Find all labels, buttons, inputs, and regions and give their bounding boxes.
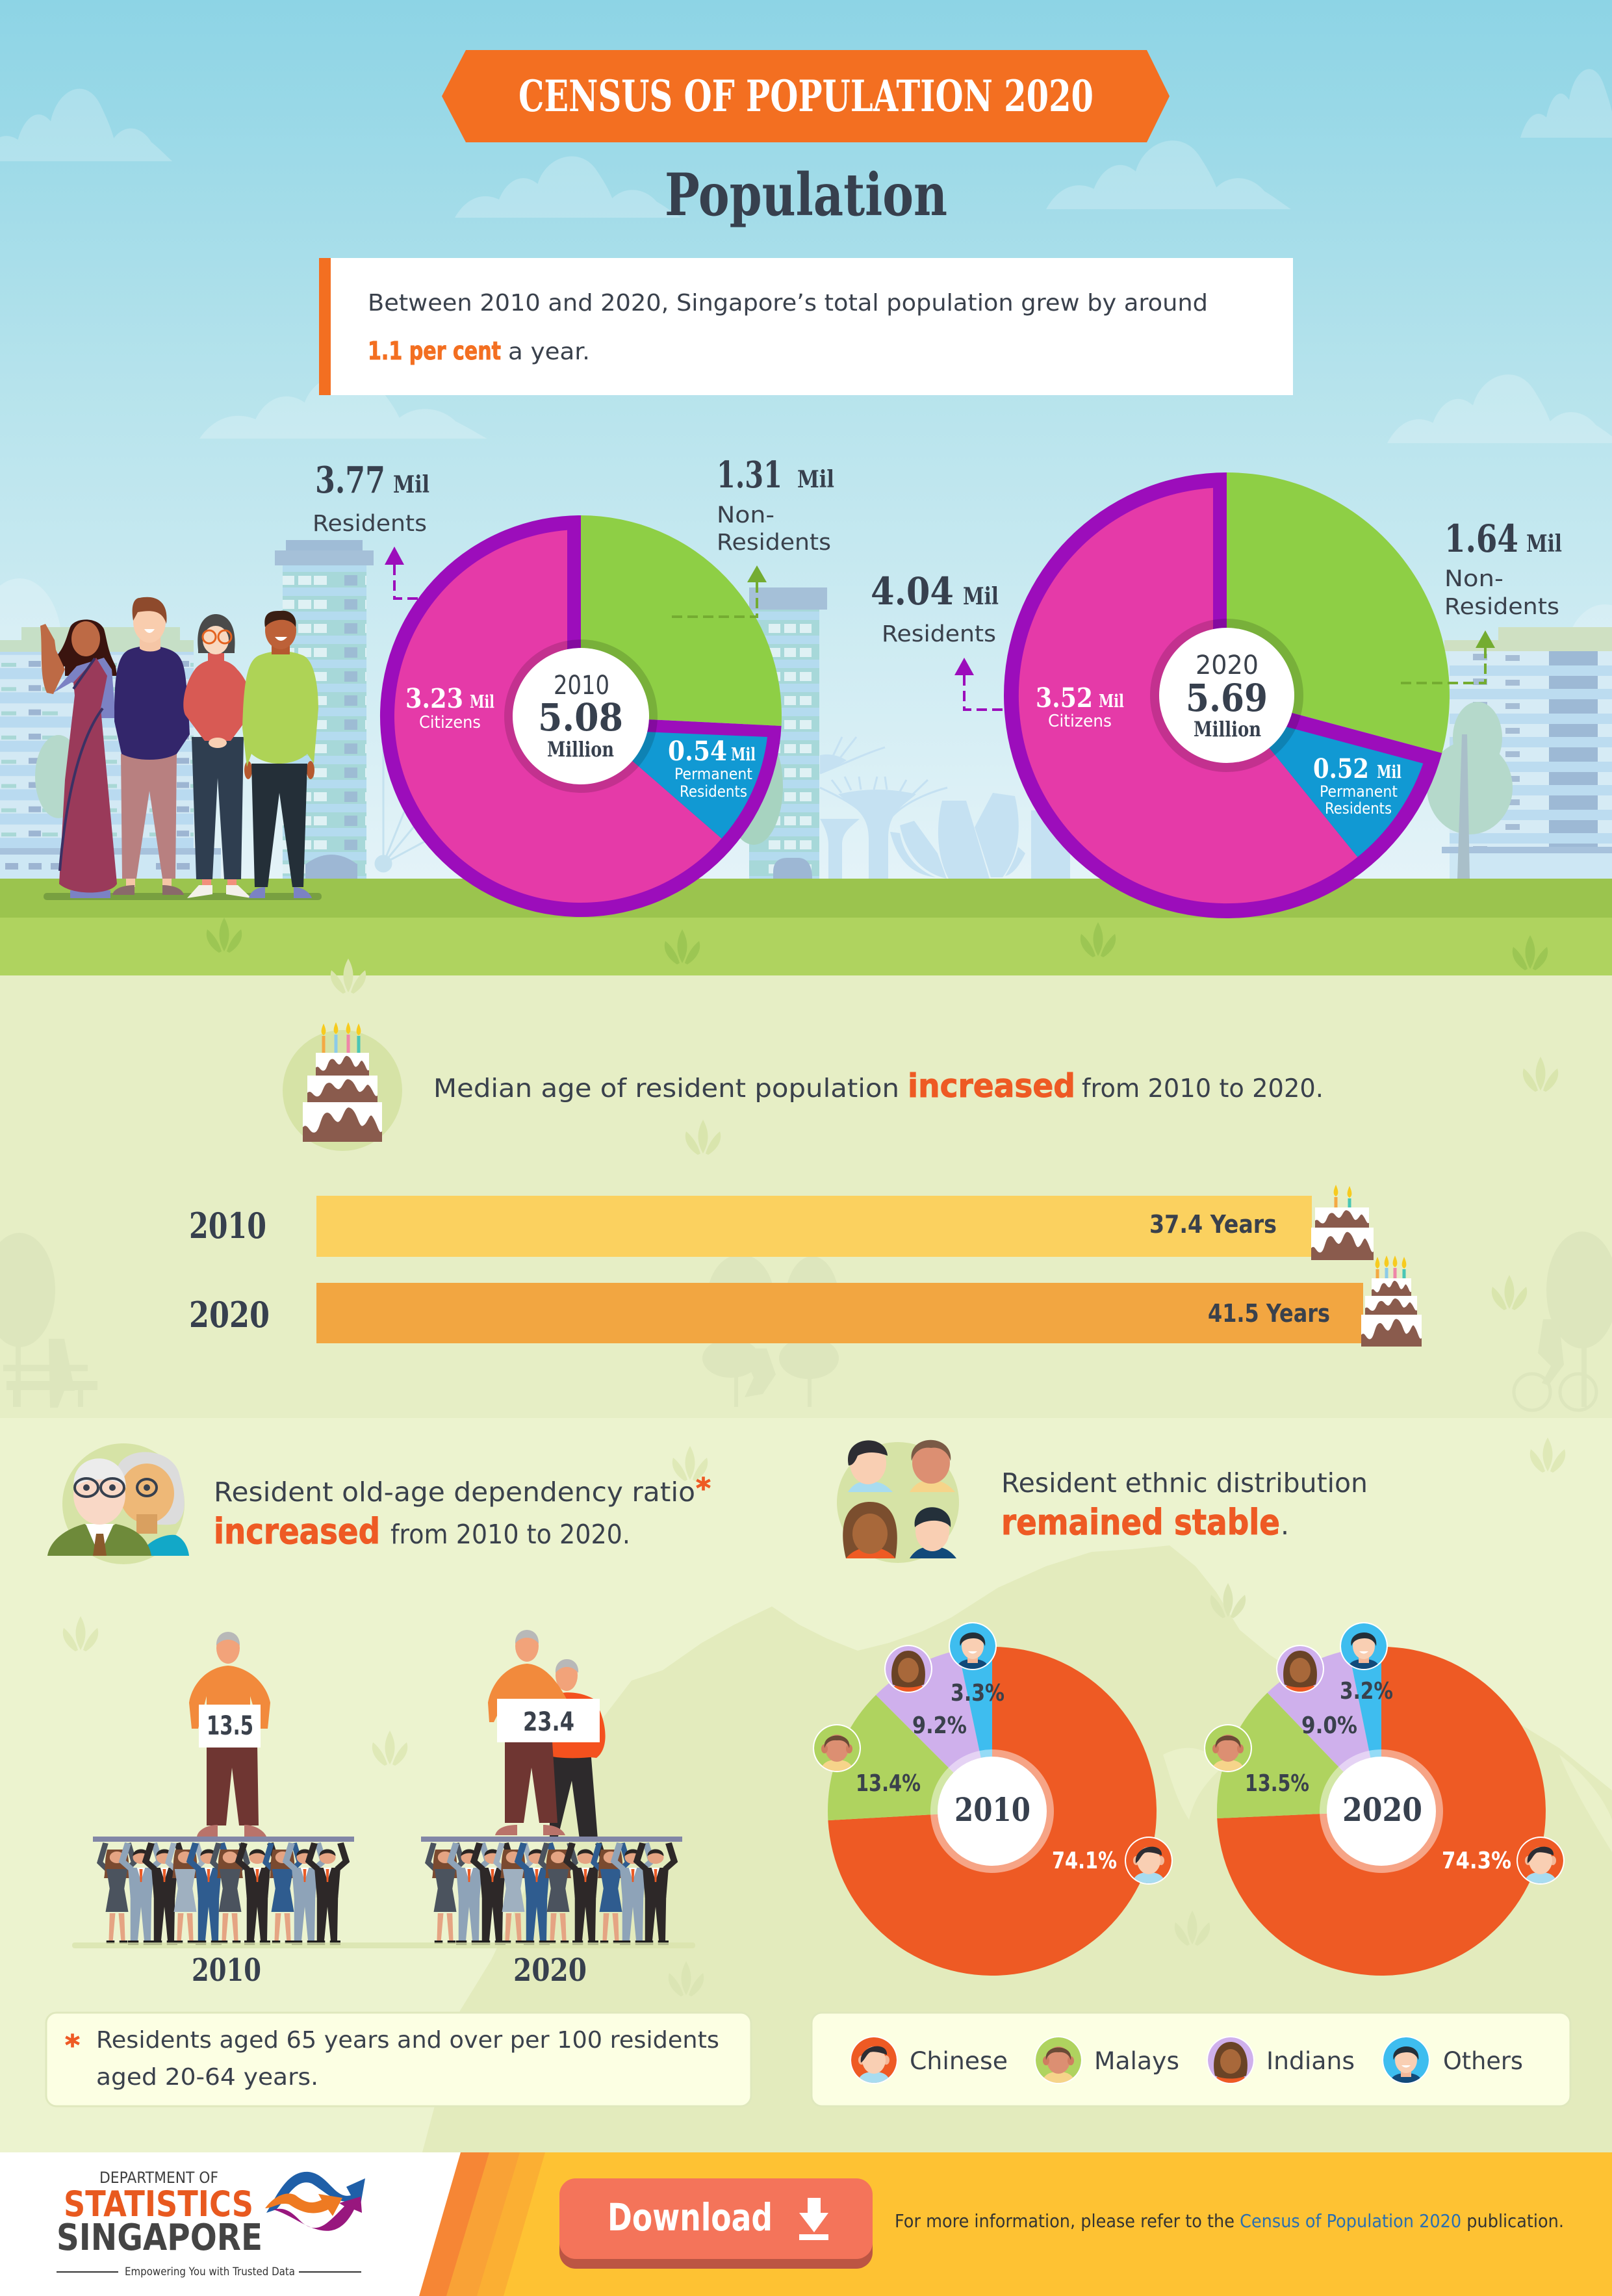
residents border [1004,472,1442,918]
heading: ethnic distribution [1001,1467,1368,1543]
callout: population growth: a year. [508,339,590,365]
label: citizens [405,683,494,732]
percentage labels: 74.3% [1442,1848,1511,1874]
residents border [380,515,782,917]
percentage labels: 13.4% [856,1770,921,1797]
icon: elderly couple [47,1443,189,1564]
centre ring [930,1749,1054,1873]
label: permanent residents: 0.52 [1313,753,1369,784]
footnote box: * [65,2029,80,2062]
year label: 2020 [513,1952,587,1989]
logo: SINGAPORE [57,2217,262,2259]
label: 2020 non-residents: 1.64 [1444,517,1518,561]
year label: 2010 [192,1952,261,1989]
label: citizens: Citizens [419,713,481,732]
label: 2020 residents: Residents [882,621,996,647]
percentage labels: 13.5% [1245,1770,1309,1797]
label: 2010 residents [313,459,429,537]
heading: median age: Median age of resident population [433,1074,899,1103]
label: 2020 residents [871,569,999,647]
title: Population [665,161,947,229]
label: permanent residents [1313,753,1401,818]
centre labels [538,671,623,762]
label: 2020 non-residents [1444,517,1562,620]
heading: dependency ratio: Resident old-age dependency ratio [214,1477,695,1508]
download button [559,2178,873,2269]
centre ring [1320,1749,1443,1873]
bar chart: median age [189,1185,1422,1347]
crowd [428,1843,674,1945]
label: permanent residents: Mil [731,745,756,765]
slice: Others [958,1647,992,1811]
bar 2020: 41.5 Years [1208,1299,1330,1328]
slice: citizens [1019,488,1357,903]
centre labels: 2020 [1196,651,1259,680]
heading: dependency ratio [214,1472,711,1552]
seniors [189,1632,270,1837]
slice: non-residents [581,515,782,726]
arrow: 2020 non-residents [1399,630,1495,683]
landmark: lotus building [890,793,1070,879]
label: citizens: Mil [470,692,494,712]
label: 2010 non-residents: Non- [717,502,774,528]
icon: cake 2010 [1311,1185,1374,1260]
people group illustration [40,597,322,900]
centre disc [1159,628,1294,763]
icon: download arrow [799,2198,828,2240]
more information note: For more information, please refer to the Census of Population 2020 publication. [895,2210,1564,2232]
centre labels: 2010 [554,671,609,701]
slice: permanent residents [1223,695,1423,857]
label: 2010 non-residents [717,454,834,556]
heading: median age [433,1067,1324,1105]
heading: dependency ratio: increased [214,1511,380,1552]
building: left tower [275,540,374,879]
bar 2020: 2020 [189,1294,270,1335]
heading: median age: from 2010 to 2020. [1082,1074,1324,1103]
slice: Chinese [828,1647,1157,1976]
dependency illustration: 2010 [93,1632,354,1989]
percentage labels: 3.2% [1340,1678,1393,1705]
section: sky and skyline background [0,0,1612,879]
heading: median age: increased [908,1067,1075,1105]
header banner [442,50,1170,142]
heading: ethnic distribution: . [1281,1510,1289,1541]
label: citizens: 3.23 [405,683,463,714]
slice: Chinese [1217,1647,1546,1976]
landmark: supertrees [820,737,947,879]
slice: non-residents [1227,472,1450,753]
year: 2010 [954,1790,1030,1829]
pie chart 2010 [380,515,782,917]
label: permanent residents: Mil [1377,762,1401,782]
arrow: 2010 non-residents [671,565,767,617]
logo: STATISTICS [64,2184,253,2225]
person: woman with glasses [183,614,252,898]
bar 2010: 2010 [189,1205,266,1246]
ferris wheel [376,747,455,871]
building: middle tower [724,587,827,879]
label: citizens: Mil [1099,691,1124,712]
label: 2010 residents: Mil [393,471,429,498]
section background: median age [0,959,1612,1418]
seniors: 23.4 [523,1707,574,1737]
bar 2020 [189,1283,1363,1343]
slice: citizens [394,530,722,903]
centre labels [1186,651,1268,742]
ground line [72,1942,695,1948]
slice: Indians [1268,1650,1381,1811]
footnote box: aged 20-64 years. [96,2064,318,2091]
icon: birthday cake [283,1022,402,1151]
section background: dependency and ethnic distribution [0,1418,1612,2152]
heading: ethnic distribution: remained stable [1001,1502,1280,1543]
person: man in green sweater [242,611,318,898]
label: permanent residents: Residents [1325,799,1392,818]
label: citizens: Citizens [1048,712,1112,731]
percentage labels: 9.2% [912,1712,967,1739]
icon: cake 2020 [1361,1256,1422,1347]
clouds [0,69,1612,708]
platform [93,1837,354,1842]
slice: Malays [1217,1693,1381,1818]
person: woman in sari [40,619,117,898]
logo: DEPARTMENT OF [99,2169,218,2187]
building: left housing block [0,627,221,879]
callout: population growth: 1.1 per cent [368,337,501,365]
footnote box: Residents aged 65 years and over per 100 residents [96,2027,719,2054]
person: man in blue sweater [112,597,190,895]
legend: Malays [1094,2047,1179,2075]
logo mark [265,2172,365,2231]
face top right [910,1440,955,1492]
header banner: CENSUS OF POPULATION 2020 [518,71,1094,122]
face top left [848,1440,893,1492]
label: 2020 residents: Mil [963,583,999,610]
grass ground [0,879,1612,975]
pie chart 2020 [1004,472,1450,918]
label: 2010 residents: 3.77 [315,459,385,502]
legend: Chinese [910,2047,1008,2075]
avatars [813,1622,1173,1885]
singapore map watermark [422,1545,1612,2152]
heading: dependency ratio: from 2010 to 2020. [390,1519,630,1550]
logo [57,2169,365,2278]
percentage labels: 9.0% [1301,1712,1357,1739]
seniors [488,1630,606,1839]
label: 2020 non-residents: Residents [1444,594,1559,620]
arrow: 2020 residents [954,658,1003,710]
centre labels: Million [547,737,614,762]
percentage labels [1245,1678,1511,1874]
label: permanent residents: 0.54 [668,736,727,767]
centre labels: Million [1194,717,1261,742]
heading: dependency ratio: * [696,1472,711,1505]
heading: ethnic distribution: Resident ethnic distribution [1001,1467,1368,1499]
label: 2020 residents: 4.04 [871,569,954,613]
percentage labels: 3.3% [951,1680,1004,1707]
label: 2010 non-residents: Residents [717,530,831,556]
seniors: 13.5 [207,1711,253,1741]
map inlets [1163,1748,1612,1852]
footnote box [46,2013,751,2106]
icon: four ethnic faces [837,1440,959,1563]
centre labels: 5.08 [538,695,623,740]
label: 2020 non-residents: Non- [1444,566,1503,592]
percentage labels: 74.1% [1052,1848,1117,1874]
donut chart: ethnic 2020 [1204,1622,1565,1976]
donut chart: ethnic 2010 [813,1622,1173,1976]
percentage labels [856,1680,1117,1874]
label: 2020 non-residents: Mil [1526,530,1562,558]
dependency illustration: 2020 [421,1630,682,1989]
label: 2010 non-residents: 1.31 [717,454,782,497]
centre labels: 5.69 [1186,676,1268,720]
centre disc [513,648,649,784]
platform [421,1837,682,1842]
face bottom right [910,1507,956,1558]
callout: population growth [319,258,1293,395]
logo: Empowering You with Trusted Data [125,2265,295,2278]
slice: Indians [876,1650,992,1811]
tree right [1427,702,1513,879]
centre ring [504,639,658,793]
label: 2010 non-residents: Mil [797,466,834,493]
legend: Indians [1266,2047,1355,2075]
label: permanent residents: Residents [680,782,747,801]
centre ring [1150,619,1303,772]
avatars [1204,1622,1565,1885]
callout: population growth: Between 2010 and 2020, Singapore’s total population grew by around [368,290,1208,316]
slice: permanent residents [580,716,767,838]
label: permanent residents [668,736,756,801]
slice: Others [1349,1647,1381,1811]
bar 2010: 37.4 Years [1149,1210,1277,1239]
footer [0,2152,1612,2296]
centre disc [938,1757,1047,1866]
label: permanent residents: Permanent [674,765,752,783]
year: 2020 [1342,1790,1422,1829]
centre disc [1327,1757,1436,1866]
legend: Others [1443,2047,1523,2075]
label: citizens: 3.52 [1036,682,1093,714]
arrow: 2010 residents [385,547,420,599]
download button: Download [608,2195,773,2239]
bar 2010 [189,1196,1312,1257]
building: right housing block [1442,627,1612,879]
crowd [100,1843,346,1945]
legend [812,2013,1570,2106]
label: citizens [1036,682,1124,731]
label: 2010 residents: Residents [313,511,427,537]
slice: Malays [828,1695,992,1820]
face bottom left [843,1502,897,1558]
label: permanent residents: Permanent [1320,782,1398,801]
